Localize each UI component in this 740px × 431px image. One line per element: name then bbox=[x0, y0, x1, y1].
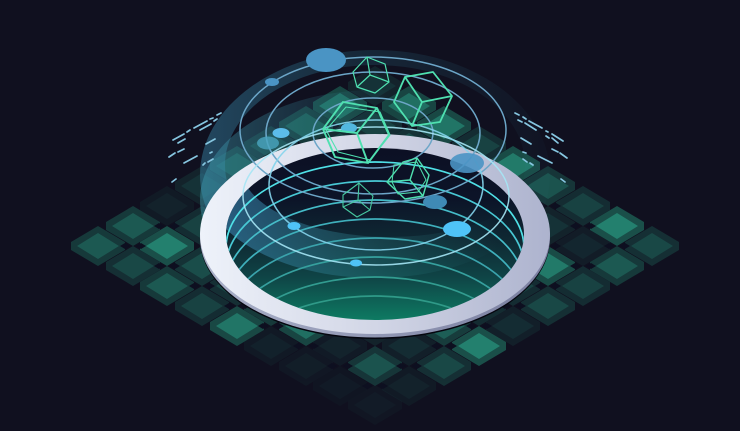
tunnel arcs bbox=[226, 161, 524, 308]
cube: top right bbox=[394, 72, 452, 126]
portal hole bbox=[226, 148, 524, 320]
orbit rings bbox=[240, 57, 509, 265]
isometric portal illustration bbox=[71, 48, 679, 418]
data dashes bbox=[169, 113, 567, 182]
back swoosh bands bbox=[200, 50, 565, 310]
portal ring bbox=[200, 134, 550, 339]
cube: top small bbox=[353, 57, 389, 93]
cube: centre large bbox=[323, 102, 390, 163]
cube: centre right bbox=[387, 158, 429, 199]
orbit dots bbox=[257, 48, 484, 266]
wireframe cubes bbox=[323, 57, 452, 217]
isometric diamond grid bbox=[71, 66, 679, 425]
inner swoosh bbox=[226, 188, 459, 277]
cube: lower small bbox=[343, 183, 373, 217]
